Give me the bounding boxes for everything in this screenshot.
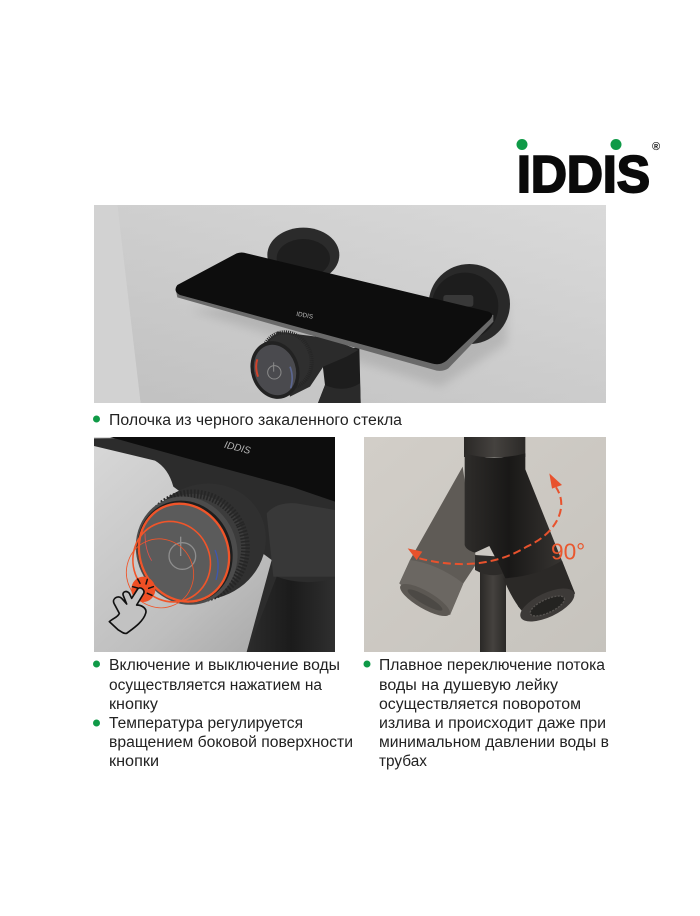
shadow under shelf (202, 307, 508, 386)
caption: flow switching: Плавное переключение потока (379, 657, 605, 674)
logo green dot right (610, 139, 622, 150)
caption: temperature: Температура регулируется (109, 715, 303, 732)
wall rosette left (267, 228, 340, 274)
icon: hand pointer (109, 588, 146, 633)
panel: spout rotation photo (364, 437, 606, 652)
black glass shelf (176, 252, 492, 364)
wall rosette right (429, 264, 510, 344)
main body and spout (465, 453, 575, 619)
bullet: shelf (93, 416, 100, 422)
caption: flow switching: трубах (379, 753, 427, 770)
caption: button on/off: кнопку (109, 696, 158, 713)
mixer body (94, 437, 335, 652)
knob face (136, 496, 238, 605)
mixer body (277, 332, 358, 397)
aerator (520, 588, 574, 622)
rotation arc arrow (408, 473, 562, 564)
caption: flow switching: воды на душевую лейку (379, 677, 558, 694)
caption: flow switching: излива и происходит даже при (379, 715, 606, 732)
hose (480, 570, 506, 652)
shelf logo: IDDIS (223, 440, 252, 457)
infographic canvas (93, 139, 660, 770)
knob face (250, 341, 300, 399)
caption: temperature: кнопки (109, 753, 159, 770)
spout pipe (318, 347, 361, 403)
black shelf (110, 437, 335, 502)
caption: button on/off: Включение и выключение воды (109, 657, 340, 674)
caption: flow switching (379, 657, 609, 770)
caption: shelf: Полочка из черного закаленного стекла (109, 412, 402, 429)
logo: IDDIS (516, 139, 660, 204)
spout cap (506, 560, 575, 611)
press indicator (131, 577, 155, 602)
lower flare (268, 577, 310, 652)
caption: flow switching: минимальном давлении воды в (379, 734, 609, 751)
bullet: button (93, 660, 100, 668)
knob knurled ring (155, 490, 264, 602)
bullet: temperature (93, 720, 100, 726)
caption: button on/off (109, 657, 340, 713)
logo wordmark: IDDIS (517, 146, 650, 204)
knob knurled ring (263, 330, 299, 344)
shelf glass edge (176, 291, 493, 371)
top pipe (464, 437, 525, 457)
orange rotation rings (126, 502, 230, 608)
caption: temperature (109, 715, 353, 770)
angle label: 90° (551, 538, 585, 564)
caption: button on/off: осуществляется нажатием на (109, 677, 322, 694)
panel: button and temperature photo (94, 437, 335, 652)
registered mark: ® (652, 141, 660, 153)
ghost spout (396, 467, 477, 622)
shelf logo: IDDIS (296, 311, 314, 321)
neck (267, 503, 335, 577)
bullet: spout (364, 660, 370, 668)
logo green dot left (516, 139, 528, 150)
caption: flow switching: осуществляется поворотом (379, 696, 581, 713)
collar (475, 555, 503, 575)
caption: temperature: вращением боковой поверхности (109, 734, 353, 751)
panel: glass shelf photo (94, 205, 606, 405)
